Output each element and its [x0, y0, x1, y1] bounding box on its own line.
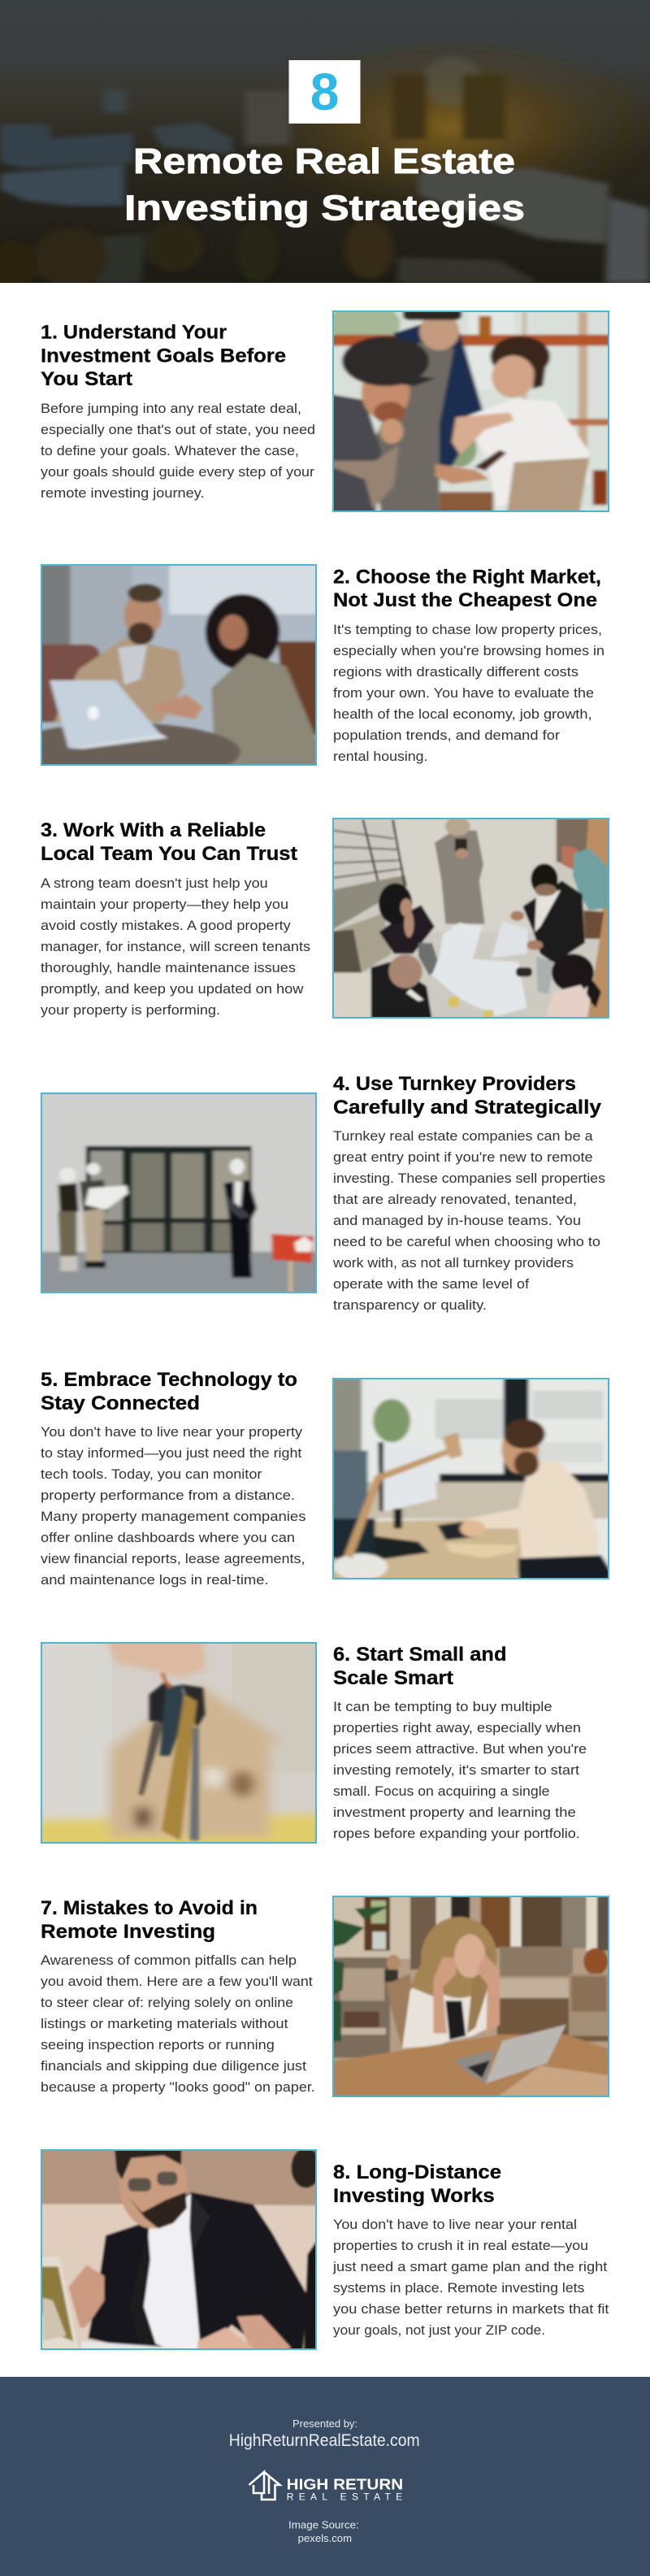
- body text 2: [333, 623, 604, 764]
- body text 4: work with, as not all turnkey providers: [332, 1256, 574, 1271]
- heading 2: [333, 566, 601, 611]
- body text 5: to stay informed—you just need the right: [41, 1446, 302, 1461]
- heading 5: 5. Embrace Technology to: [41, 1369, 297, 1391]
- photo: keys in front of a model house: [41, 1642, 317, 1844]
- heading 1: Investment Goals Before: [41, 345, 286, 367]
- image source credit: pexels.com: [298, 2532, 352, 2544]
- heading 6: [333, 1644, 507, 1689]
- body text 7: financials and skipping due diligence just: [41, 2059, 306, 2074]
- body text 7: seeing inspection reports or running: [41, 2038, 275, 2053]
- body text 5: offer online dashboards where you can: [41, 1531, 295, 1545]
- footer: [0, 2377, 650, 2576]
- photo: agents at building with for-sale sign: [41, 1093, 317, 1293]
- panel: strategy 6: [41, 1642, 587, 1844]
- heading 2: 2. Choose the Right Market,: [333, 566, 601, 589]
- body text 2: rental housing.: [333, 749, 427, 764]
- photo: colleagues with laptop: [41, 564, 317, 766]
- body text 4: need to be careful when choosing who to: [333, 1235, 600, 1249]
- body text 5: and maintenance logs in real-time.: [41, 1573, 269, 1588]
- body text 1: Before jumping into any real estate deal,: [41, 402, 301, 416]
- body text 5: view financial reports, lease agreements,: [41, 1552, 306, 1566]
- heading 1: You Start: [41, 368, 132, 390]
- photo: team reviewing plans from above: [332, 818, 609, 1019]
- body text 4: operate with the same level of: [333, 1277, 529, 1292]
- body text 8: [332, 2218, 609, 2338]
- panel: strategy 4: [25, 1073, 605, 1313]
- heading 3: Local Team You Can Trust: [41, 843, 297, 865]
- body text 8: you chase better returns in markets that fit: [333, 2302, 609, 2317]
- body text 6: small. Focus on acquiring a single: [333, 1784, 549, 1799]
- body text 7: you avoid them. Here are a few you'll want: [41, 1974, 313, 1989]
- heading 4: 4. Use Turnkey Providers: [333, 1073, 576, 1095]
- body text 1: especially one that's out of state, you need: [41, 423, 315, 437]
- body text 4: that are already renovated, tenanted,: [333, 1192, 577, 1207]
- body text 8: systems in place. Remote investing lets: [333, 2281, 584, 2296]
- heading 7: [41, 1897, 258, 1943]
- logo wordmark: [287, 2476, 403, 2503]
- body text 7: [41, 1953, 315, 2095]
- panel: strategy 2: [41, 564, 604, 766]
- body text 3: [41, 876, 310, 1018]
- body text 3: your property is performing.: [41, 1003, 220, 1018]
- body text 5: tech tools. Today, you can monitor: [41, 1467, 262, 1482]
- body text 5: Many property management companies: [41, 1510, 306, 1524]
- title: [124, 141, 525, 228]
- presented by credit: Presented by:: [292, 2418, 358, 2430]
- body text 4: and managed by in-house teams. You: [333, 1214, 581, 1228]
- panel: strategy 3: [41, 818, 609, 1019]
- body text 2: regions with drastically different costs: [333, 665, 578, 680]
- heading 5: Stay Connected: [41, 1392, 200, 1414]
- body text 7: Awareness of common pitfalls can help: [41, 1953, 297, 1968]
- body text 3: A strong team doesn't just help you: [41, 876, 268, 891]
- heading 6: Scale Smart: [333, 1667, 453, 1689]
- body text 6: investing remotely, it's smarter to start: [333, 1763, 579, 1778]
- body text 7: listings or marketing materials without: [41, 2017, 288, 2031]
- heading 7: 7. Mistakes to Avoid in: [41, 1897, 258, 1919]
- heading 8: 8. Long-Distance: [333, 2161, 501, 2183]
- body text 3: promptly, and keep you updated on how: [41, 982, 304, 997]
- body text 6: investment property and learning the: [333, 1805, 576, 1820]
- panel: strategy 1: [41, 302, 622, 520]
- presented by credit: HighReturnRealEstate.com: [229, 2431, 420, 2450]
- number badge: [289, 60, 361, 124]
- body text 6: prices seem attractive. But when you're: [333, 1742, 587, 1757]
- body text 4: transparency or quality.: [333, 1298, 487, 1313]
- body text 1: remote investing journey.: [41, 486, 205, 501]
- body text 2: especially when you're browsing homes in: [333, 644, 604, 658]
- body text 5: You don't have to live near your property: [41, 1425, 303, 1440]
- heading 3: 3. Work With a Reliable: [41, 819, 266, 841]
- heading 5: [41, 1369, 297, 1414]
- body text 2: population trends, and demand for: [333, 728, 561, 743]
- image source credit: [288, 2519, 359, 2544]
- body text 4: investing. These companies sell properties: [333, 1171, 605, 1186]
- body text 3: manager, for instance, will screen tenants: [41, 940, 310, 954]
- heading 1: [41, 322, 286, 390]
- body text 6: properties right away, especially when: [333, 1721, 581, 1735]
- photo: stressed woman on phone at laptop: [332, 1896, 609, 2097]
- header banner: [0, 0, 650, 290]
- logo wordmark: REAL ESTATE: [287, 2491, 402, 2503]
- body text 6: It can be tempting to buy multiple: [333, 1700, 552, 1714]
- body text 3: maintain your property—they help you: [41, 897, 288, 912]
- body text 1: [41, 402, 315, 501]
- heading 1: 1. Understand Your: [41, 322, 227, 343]
- body text 2: It's tempting to chase low property prices,: [333, 623, 602, 637]
- photo: man smiling at desktop computer: [332, 1378, 609, 1579]
- body text 5: property performance from a distance.: [41, 1488, 295, 1503]
- logo: High Return Real Estate: [249, 2472, 403, 2503]
- heading 8: Investing Works: [333, 2185, 495, 2207]
- presented by credit: [229, 2418, 420, 2450]
- body text 8: your goals, not just your ZIP code.: [333, 2323, 545, 2338]
- title: Remote Real Estate: [133, 141, 515, 181]
- body text 6: [333, 1700, 587, 1841]
- body text 8: properties to crush it in real estate—you: [333, 2239, 588, 2253]
- title: Investing Strategies: [124, 189, 525, 228]
- icon: double house: [249, 2472, 280, 2500]
- heading 4: [333, 1073, 601, 1119]
- body text 8: just need a smart game plan and the right: [332, 2260, 608, 2274]
- body text 3: avoid costly mistakes. A good property: [41, 919, 292, 933]
- heading 8: [333, 2161, 501, 2207]
- body text 5: [41, 1425, 306, 1588]
- panel: strategy 5: [41, 1369, 622, 1588]
- body text 4: great entry point if you're new to remote: [333, 1150, 593, 1165]
- image source credit: Image Source:: [288, 2519, 359, 2531]
- header photo: city skyline at sunset: [0, 0, 650, 290]
- body text 7: because a property "looks good" on paper.: [41, 2080, 315, 2095]
- body text 8: You don't have to live near your rental: [333, 2218, 577, 2232]
- heading 3: [41, 819, 297, 865]
- panel: strategy 8: [41, 2149, 609, 2350]
- body text 3: thoroughly, handle maintenance issues: [41, 961, 296, 975]
- body text 6: ropes before expanding your portfolio.: [333, 1827, 580, 1841]
- heading 6: 6. Start Small and: [333, 1644, 507, 1666]
- body text 2: from your own. You have to evaluate the: [333, 686, 594, 701]
- body text 2: health of the local economy, job growth,: [333, 707, 592, 722]
- heading 4: Carefully and Strategically: [333, 1097, 601, 1119]
- logo wordmark: HIGH RETURN: [287, 2476, 403, 2492]
- body text 1: to define your goals. Whatever the case,: [41, 444, 299, 458]
- body text 1: your goals should guide every step of your: [41, 465, 315, 480]
- photo: man in dark suit with glasses: [41, 2149, 317, 2350]
- photo: team looking at phone: [332, 311, 609, 512]
- body text 4: [332, 1129, 605, 1313]
- panel: strategy 7: [41, 1896, 609, 2097]
- heading 7: Remote Investing: [41, 1921, 215, 1943]
- body text 7: to steer clear of: relying solely on online: [41, 1996, 293, 2010]
- number badge: 8: [310, 63, 339, 121]
- heading 2: Not Just the Cheapest One: [333, 589, 597, 611]
- body text 4: Turnkey real estate companies can be a: [333, 1129, 593, 1144]
